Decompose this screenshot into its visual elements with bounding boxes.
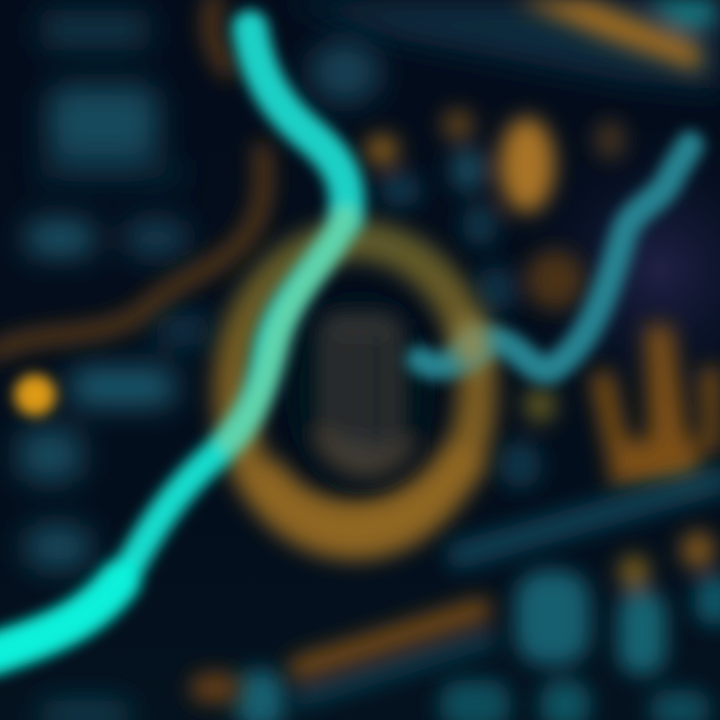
cyan curve line [0, 28, 347, 655]
diagonal teal band [460, 480, 720, 555]
gold ring [233, 240, 477, 540]
top right gold band [515, 0, 715, 72]
panel: top centre blob [309, 40, 381, 104]
coin centre with dollar symbol [292, 298, 428, 486]
ring highlight at crossing [454, 319, 490, 371]
brown bar chart bottom right [590, 325, 720, 490]
brown curve line [0, 0, 264, 352]
bottom brown and teal strokes [205, 610, 490, 700]
scattered mid-right markers [365, 109, 626, 489]
gold data dot [14, 374, 56, 416]
teal rising line [420, 145, 690, 370]
panel: left blurred text blocks [18, 10, 210, 720]
panel: bottom blurred bars [235, 531, 720, 720]
